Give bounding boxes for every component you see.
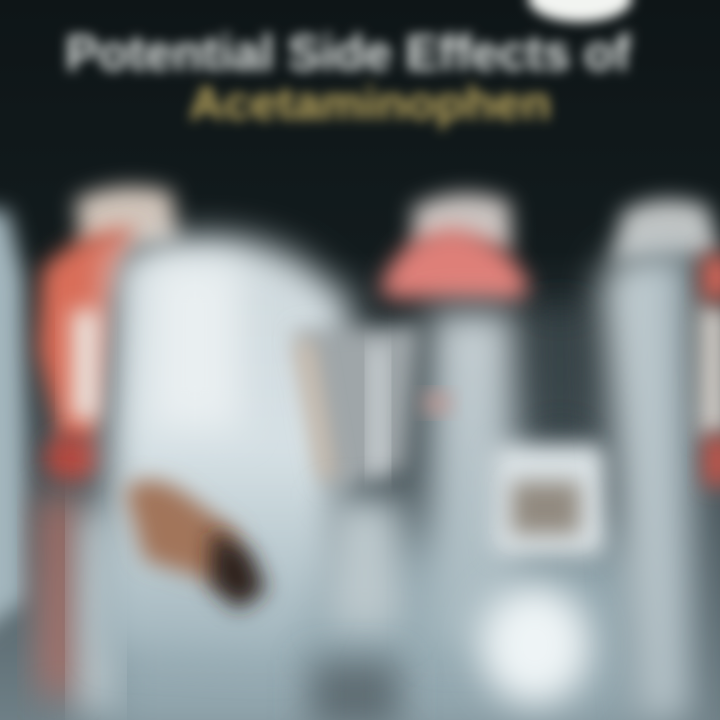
highlight body — [150, 260, 240, 430]
body right bottle — [600, 250, 695, 720]
middle bottle — [380, 193, 530, 650]
center glass — [295, 325, 420, 720]
glass edge — [295, 340, 335, 480]
floor reflection — [90, 540, 650, 720]
cap middle bottle — [412, 193, 512, 250]
title: Potential Side Effects of — [66, 25, 631, 81]
white reflection — [82, 510, 110, 710]
red top right bottle — [702, 255, 720, 300]
brown tan — [125, 480, 240, 585]
red band middle bottle — [380, 228, 530, 300]
jar body — [492, 444, 606, 556]
red foot right bottle — [704, 436, 720, 486]
side right bottle — [698, 305, 720, 435]
cap right bottle — [612, 199, 720, 262]
dark gap between bottles — [535, 310, 585, 430]
glass stem — [330, 500, 400, 630]
far left bottle — [0, 210, 26, 640]
brown dark — [210, 530, 266, 610]
body middle bottle — [430, 310, 515, 650]
floor glow — [480, 585, 590, 705]
right bottle — [600, 199, 720, 720]
glass body — [295, 325, 420, 490]
jar interior — [512, 482, 580, 534]
glass shadow bottom — [310, 660, 400, 720]
brown object — [125, 480, 266, 610]
red reflection — [40, 495, 78, 695]
subtitle: Acetaminophen — [189, 77, 551, 129]
red foot left bottle — [44, 434, 100, 482]
red mark middle bottle — [425, 395, 449, 411]
red band left bottle — [38, 228, 135, 445]
moon glow at top — [528, 0, 632, 22]
small jar — [492, 444, 606, 556]
left bottle — [38, 187, 350, 710]
pale strip left bottle — [72, 310, 100, 420]
cap left bottle — [75, 187, 178, 250]
glass highlight — [372, 345, 384, 475]
big white body — [105, 236, 350, 660]
